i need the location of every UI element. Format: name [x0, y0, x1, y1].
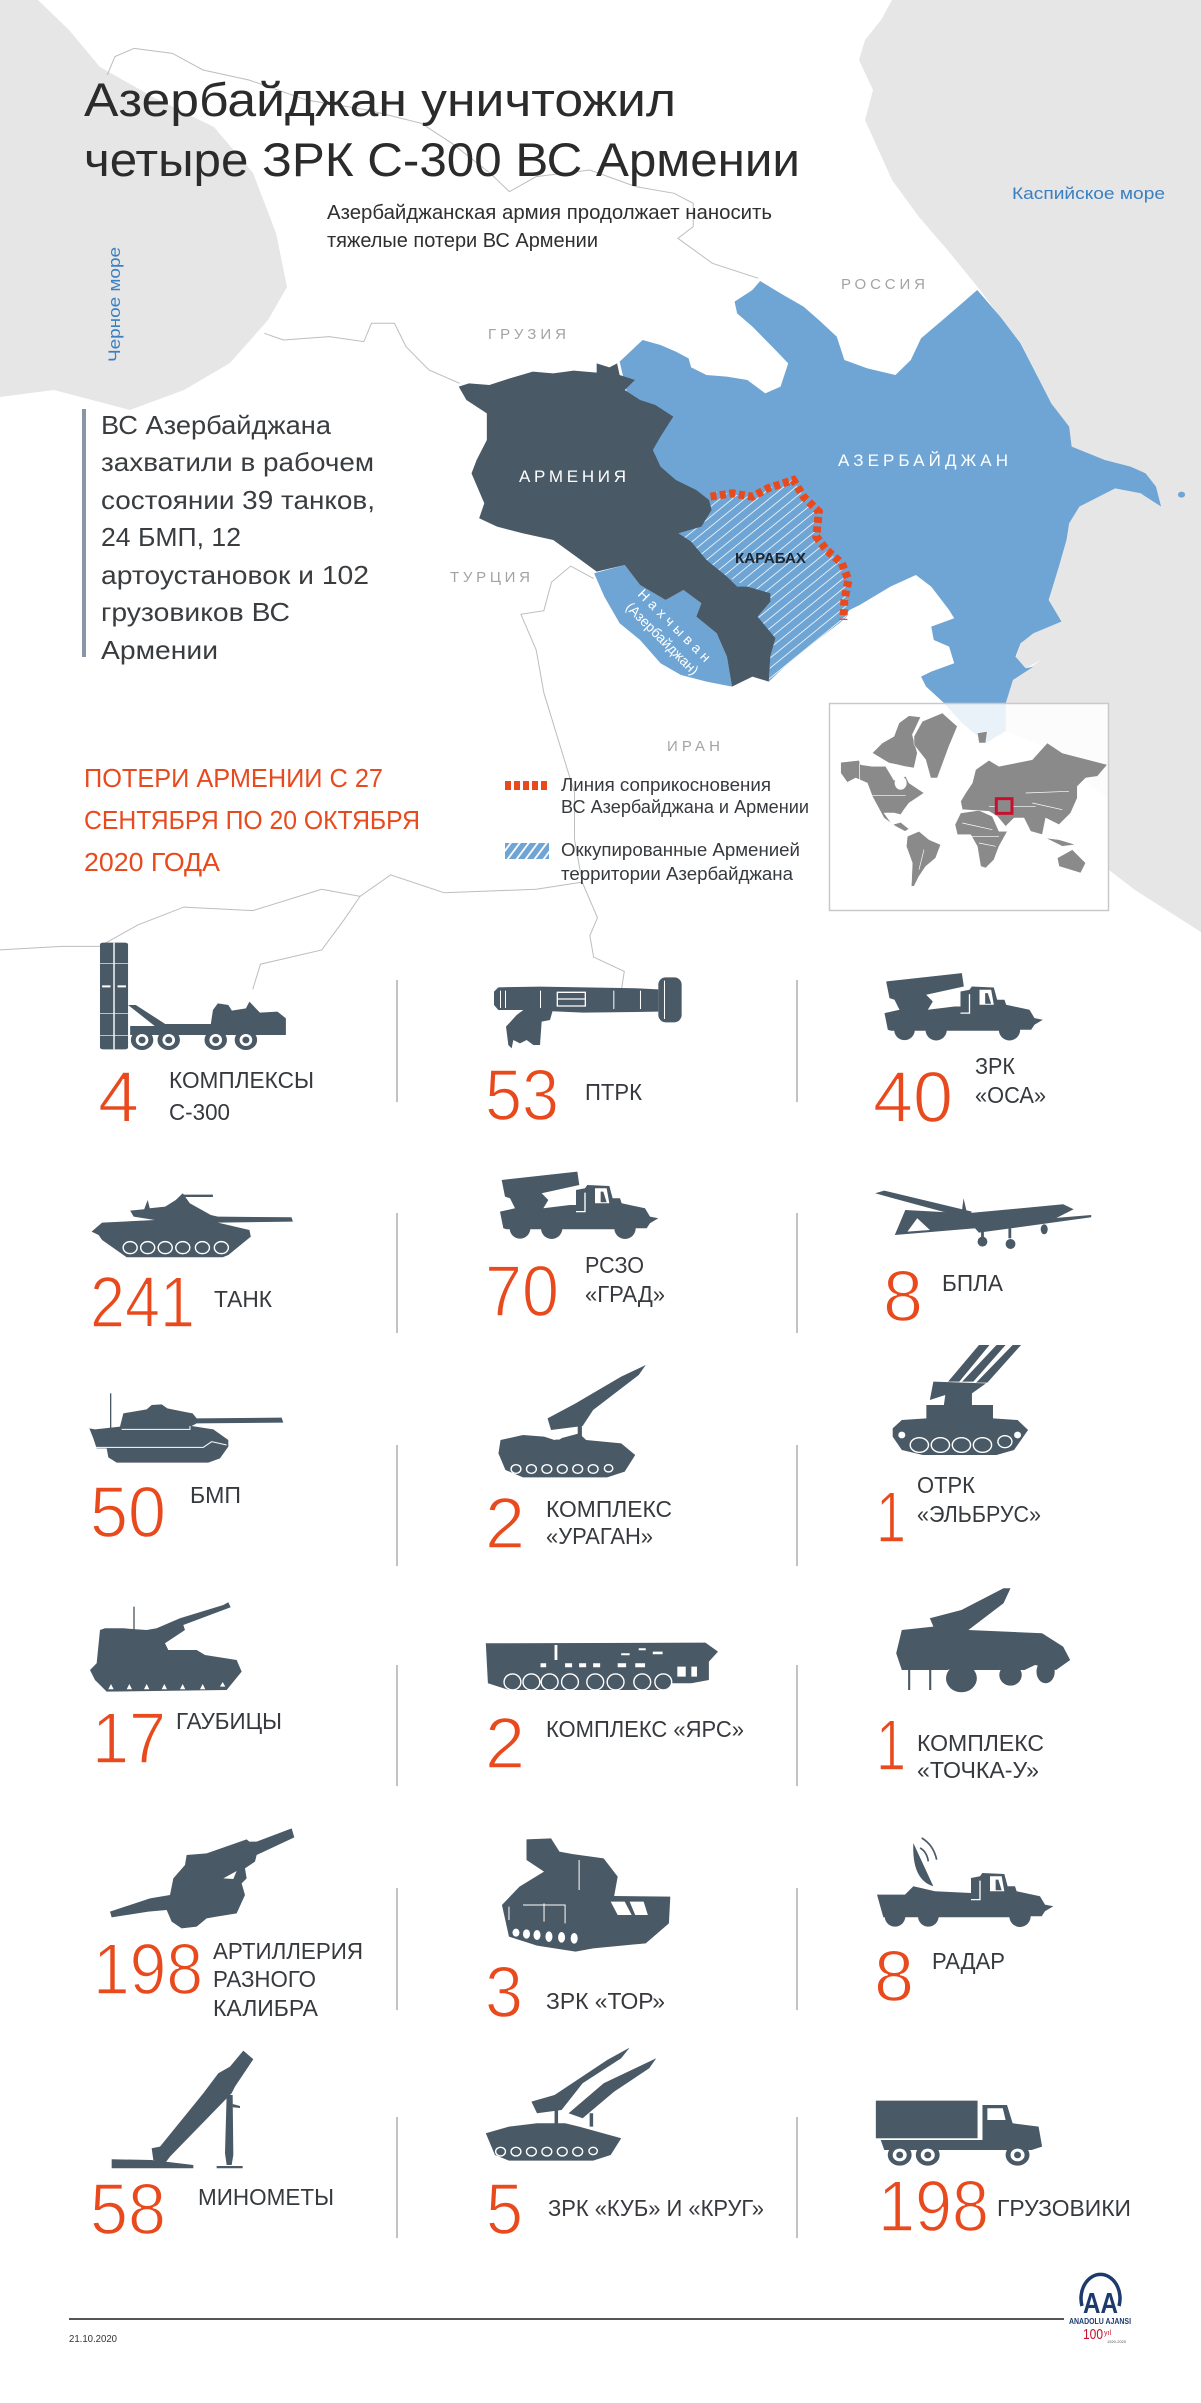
label — [169, 1067, 314, 1125]
label: ГРУЗОВИКИ — [997, 2195, 1131, 2221]
icon: Yars launcher — [486, 1643, 718, 1690]
number: 8 — [883, 1257, 923, 1337]
subtitle: тяжелые потери ВС Армении — [327, 230, 598, 252]
callout: captured equipment — [82, 409, 375, 665]
label: РАДАР — [932, 1948, 1005, 1974]
label: «ЭЛЬБРУС» — [917, 1501, 1041, 1527]
icon: tracked launcher — [498, 1365, 646, 1477]
label — [585, 1252, 665, 1307]
number: 1 — [876, 1706, 906, 1786]
number: 2 — [485, 1704, 525, 1784]
legend: contact line text — [561, 775, 809, 817]
number: 53 — [485, 1056, 559, 1136]
Black Sea — [0, 0, 287, 410]
icon: mortar — [112, 2051, 253, 2168]
label: ЗРК — [975, 1053, 1016, 1079]
number: 8 — [874, 1937, 914, 2017]
title: Азербайджан уничтожил — [84, 73, 676, 126]
label: «ГРАД» — [585, 1281, 665, 1307]
title — [84, 73, 800, 186]
label — [917, 1730, 1044, 1783]
date: 21.10.2020 — [69, 2334, 117, 2345]
item: Tochka-U — [876, 1588, 1070, 1786]
label: Karabakh: КАРАБАХ — [735, 550, 806, 567]
label: «ОСА» — [975, 1082, 1046, 1108]
icon: IFV — [89, 1393, 283, 1463]
label: Azerbaijan: АЗЕРБАЙДЖАН — [838, 451, 1008, 470]
icon: ATGM — [494, 977, 682, 1048]
number: 1 — [876, 1478, 906, 1558]
icon: tracked missile launcher — [893, 1345, 1028, 1455]
item: Uragan — [485, 1365, 672, 1564]
heading: losses period: 2020 ГОДА — [84, 847, 221, 877]
label: «УРАГАН» — [546, 1523, 653, 1549]
label: ТАНК — [214, 1286, 273, 1312]
item: howitzers — [90, 1602, 282, 1779]
label: Black Sea: Черное море — [105, 247, 124, 362]
item: Osa — [873, 973, 1046, 1138]
number: 198 — [878, 2167, 989, 2247]
number: 2 — [485, 1484, 525, 1564]
label: КОМПЛЕКС «ЯРС» — [546, 1716, 744, 1742]
label — [917, 1472, 1041, 1527]
callout: captured equipment: артоустановок и 102 — [101, 560, 369, 590]
number: 40 — [873, 1058, 953, 1138]
logo: Anadolu Agency: 1920-2020 — [1107, 2339, 1127, 2344]
label: Armenia: АРМЕНИЯ — [519, 467, 626, 486]
legend: occupied text — [561, 840, 800, 884]
locator world map — [830, 704, 1108, 910]
legend: occupied text: Оккупированные Арменией — [561, 840, 800, 860]
legend: contact line text: ВС Азербайджана и Армении — [561, 797, 809, 817]
footer rule — [69, 2318, 1064, 2320]
Azerbaijan — [620, 281, 1161, 743]
legend: occupied swatch — [505, 843, 549, 859]
logo: Anadolu Agency — [1069, 2274, 1131, 2344]
label — [213, 1938, 363, 2021]
callout: captured equipment: 24 БМП, 12 — [101, 522, 241, 552]
item: Tor — [485, 1838, 670, 2033]
number: 70 — [485, 1252, 559, 1332]
item: drones — [875, 1191, 1091, 1337]
heading: losses period: СЕНТЯБРЯ ПО 20 ОКТЯБРЯ — [84, 805, 420, 835]
dividers — [397, 980, 797, 2238]
map background — [0, 0, 1201, 996]
icon: field gun — [110, 1828, 294, 1928]
label: АРТИЛЛЕРИЯ — [213, 1938, 363, 1964]
item: anti-tank missiles — [485, 977, 682, 1136]
item: artillery — [93, 1828, 363, 2021]
logo: Anadolu Agency: yıl — [1104, 2330, 1111, 2337]
label: ОТРК — [917, 1472, 976, 1498]
Caspian Sea — [859, 0, 1201, 932]
callout: captured equipment: грузовиков ВС — [101, 597, 290, 627]
label: ПТРК — [585, 1079, 643, 1105]
item: tanks — [90, 1193, 293, 1343]
label: ГАУБИЦЫ — [176, 1708, 282, 1734]
number: 50 — [90, 1473, 166, 1553]
logo: Anadolu Agency: ANADOLU AJANSI — [1069, 2317, 1131, 2326]
item: IFV — [89, 1393, 283, 1553]
label — [975, 1053, 1046, 1108]
item: Kub and Krug — [486, 2048, 764, 2250]
legend — [505, 775, 809, 884]
Karabakh occupied area — [678, 480, 850, 682]
item: Elbrus — [876, 1345, 1041, 1558]
Nakhchivan — [594, 565, 732, 687]
legend: contact line swatch — [505, 781, 549, 790]
number: 241 — [90, 1263, 195, 1343]
item: Grad — [485, 1172, 665, 1332]
icon: Tor system — [502, 1838, 670, 1952]
icon: radar truck — [877, 1838, 1053, 1927]
icon: Kub launcher — [486, 2048, 656, 2161]
number: 5 — [486, 2170, 523, 2250]
label: «ТОЧКА-У» — [917, 1757, 1039, 1783]
label: РСЗО — [585, 1252, 644, 1278]
number: 3 — [485, 1953, 523, 2033]
icon: launcher truck — [884, 973, 1043, 1040]
icon: S-300 launcher — [100, 943, 286, 1050]
subtitle — [327, 202, 772, 252]
subtitle: Азербайджанская армия продолжает наносить — [327, 202, 772, 224]
label: КОМПЛЕКС — [917, 1730, 1044, 1756]
Caspian island — [1178, 492, 1185, 498]
label: Nakhchivan: (Азербайджан) — [623, 599, 702, 678]
label: Caspian Sea: Каспийское море — [1012, 184, 1165, 203]
icon: Tochka launcher — [896, 1588, 1070, 1692]
legend: contact line text: Линия соприкосновения — [561, 775, 771, 795]
heading: losses period — [84, 763, 420, 877]
Armenia — [459, 363, 775, 687]
icon: UAV — [875, 1191, 1091, 1249]
label: Russia: РОССИЯ — [841, 276, 925, 293]
label: С-300 — [169, 1099, 230, 1125]
label: Iran: ИРАН — [667, 738, 720, 755]
icon: MLRS truck — [500, 1172, 658, 1239]
map: countries — [459, 281, 1185, 743]
number: 17 — [92, 1699, 166, 1779]
label: КОМПЛЕКС — [546, 1496, 672, 1522]
label: БМП — [190, 1482, 241, 1508]
callout: captured equipment: Армении — [101, 635, 218, 665]
label: МИНОМЕТЫ — [198, 2184, 334, 2210]
heading: losses period: ПОТЕРИ АРМЕНИИ С 27 — [84, 763, 383, 793]
icon: cargo truck — [876, 2101, 1042, 2166]
item: Yars — [485, 1643, 744, 1784]
label — [546, 1496, 672, 1549]
line of contact — [711, 480, 848, 620]
label: КАЛИБРА — [213, 1995, 319, 2021]
callout: captured equipment: состоянии 39 танков, — [101, 485, 375, 515]
item: mortars — [90, 2051, 334, 2250]
icon: tank — [92, 1193, 293, 1257]
callout: captured equipment: ВС Азербайджана — [101, 410, 332, 440]
number: 4 — [98, 1058, 139, 1138]
label: ЗРК «ТОР» — [546, 1988, 665, 2014]
label: КОМПЛЕКСЫ — [169, 1067, 314, 1093]
icon: self-propelled howitzer — [90, 1602, 242, 1692]
legend: occupied text: территории Азербайджана — [561, 864, 794, 884]
number: 58 — [90, 2170, 166, 2250]
item: S-300 — [98, 943, 314, 1138]
logo: Anadolu Agency: 100 — [1083, 2326, 1103, 2343]
title: четыре ЗРК С-300 ВС Армении — [84, 133, 800, 186]
item: radars — [874, 1838, 1053, 2017]
number: 198 — [93, 1930, 203, 2010]
callout: captured equipment: захватили в рабочем — [101, 447, 374, 477]
label: БПЛА — [942, 1270, 1004, 1296]
label: Nakhchivan: Нахчыван — [635, 586, 714, 665]
country borders — [0, 48, 758, 996]
item: trucks — [876, 2101, 1131, 2247]
label: ЗРК «КУБ» И «КРУГ» — [548, 2195, 764, 2221]
label: Turkey: ТУРЦИЯ — [450, 569, 530, 586]
label: РАЗНОГО — [213, 1966, 316, 1992]
logo: Anadolu Agency: AA — [1083, 2288, 1118, 2320]
label: Georgia: ГРУЗИЯ — [488, 326, 566, 343]
